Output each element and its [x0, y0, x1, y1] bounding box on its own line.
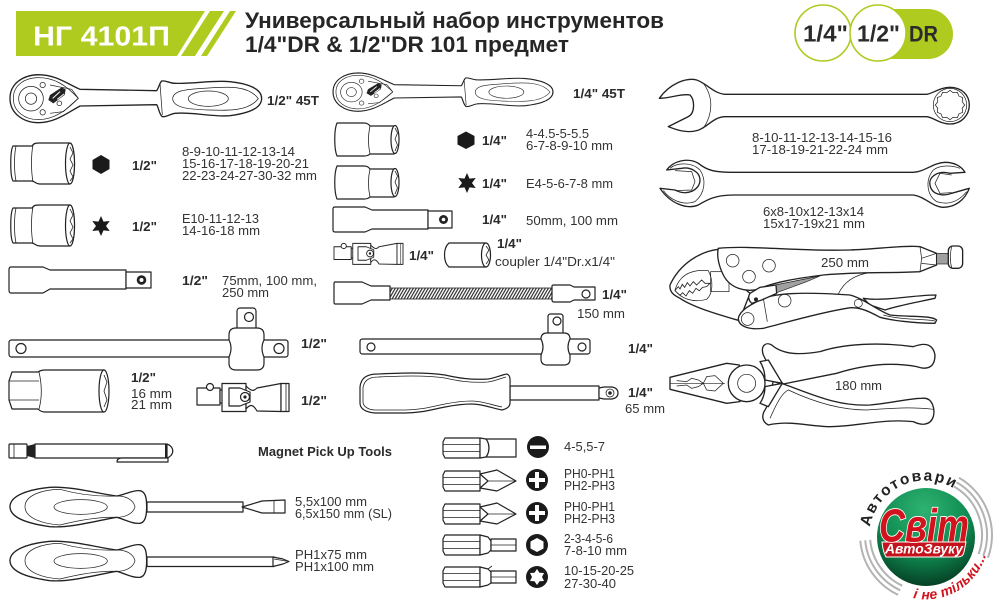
label: ratchet 1/2: 1/2" 45T: [267, 93, 319, 108]
logo: [859, 472, 993, 600]
text: torx sizes: 14-16-18 mm: [182, 224, 260, 238]
icon: phillips 1: [526, 469, 548, 491]
text: hex sizes: 7-8-10 mm: [564, 544, 627, 558]
text: flare wrench sizes: [763, 205, 865, 231]
label: extension 1/2: 1/2": [182, 273, 208, 288]
text: deep socket: [131, 370, 172, 412]
label: joint 1/4: 1/4": [409, 248, 434, 263]
label: locking pliers: 250 mm: [821, 256, 869, 270]
text: flex length: 150 mm: [577, 307, 625, 321]
logo: Автотовари: [860, 472, 956, 526]
extension 1/2: [9, 267, 151, 293]
title: Универсальный набор инструментов: [245, 8, 664, 33]
text: phillips screwdriver: PH1x100 mm: [295, 560, 374, 574]
bit: hex: [443, 535, 516, 555]
phillips screwdriver: [10, 541, 289, 581]
label: size 1/4: 1/4": [482, 133, 507, 148]
label: size 1/4: 1/4": [482, 176, 507, 191]
text: coupler: coupler 1/4"Dr.x1/4": [495, 255, 615, 269]
socket 1/2 torx: [11, 205, 74, 246]
text: socket sizes: 15-16-17-18-19-20-21: [182, 157, 309, 171]
coupler: [444, 243, 490, 267]
label: flex 1/4: 1/4": [602, 287, 627, 302]
text: hex sizes: [564, 532, 627, 558]
text: phillips 1 sizes: [564, 467, 615, 493]
universal joint 1/2: [197, 384, 289, 412]
text: torx sizes: 10-15-20-25: [564, 564, 634, 578]
icon: hexagon: [92, 155, 110, 174]
bit: slotted: [443, 438, 516, 458]
text: flat screwdriver: 5,5x100 mm: [295, 495, 367, 509]
icon: slotted: [527, 436, 549, 458]
text: combination wrench sizes: 8-10-11-12-13-14-15-16: [752, 131, 892, 145]
text: phillips 2 sizes: PH2-PH3: [564, 512, 615, 526]
text: extension sizes: 75mm, 100 mm,: [222, 274, 317, 288]
icon: torx: [526, 566, 548, 588]
text: phillips 1 sizes: PH2-PH3: [564, 479, 615, 493]
label: T-bar 1/2: 1/2": [301, 336, 327, 351]
text: slotted sizes: 4-5,5-7: [564, 440, 605, 454]
text: phillips 2 sizes: [564, 500, 615, 526]
socket 1/4 torx: [335, 166, 399, 199]
label: spinner size: 1/4": [628, 385, 653, 400]
text: flat screwdriver: 6,5x150 mm (SL): [295, 507, 392, 521]
text: torx sizes: [182, 212, 260, 238]
logo: АвтоЗвуку: [884, 540, 964, 556]
label: extension 1/4: 1/4": [482, 212, 507, 227]
icon: star: [458, 173, 476, 193]
flare nut wrench: [660, 160, 969, 207]
text: torx sizes: [564, 564, 634, 591]
text: torx sizes 1/4: E4-5-6-7-8 mm: [526, 177, 613, 191]
text: coupler: 1/4": [497, 236, 522, 251]
text: socket sizes: 8-9-10-11-12-13-14: [182, 145, 295, 159]
text: torx sizes: 27-30-40: [564, 577, 616, 591]
locking pliers: [670, 246, 963, 329]
icon: star: [92, 216, 110, 236]
icon: hexagon: [458, 132, 474, 149]
label: size 1/2: 1/2": [132, 219, 157, 234]
text: socket sizes 1/4: 4-4.5-5-5.5: [526, 127, 589, 141]
banner: model number: НГ 4101П: [33, 20, 170, 52]
text: magnet tool: Magnet Pick Up Tools: [258, 445, 392, 459]
icon: phillips 2: [526, 502, 548, 524]
sliding T-bar 1/2: [9, 308, 288, 370]
text: deep socket: 16 mm: [131, 387, 172, 401]
combination wrench: [659, 79, 969, 132]
text: phillips screwdriver: [295, 548, 374, 574]
text: combination wrench sizes: [752, 131, 892, 157]
bit: torx: [443, 566, 516, 587]
text: phillips screwdriver: PH1x75 mm: [295, 548, 367, 562]
label: joint 1/2: 1/2": [301, 393, 327, 408]
text: socket sizes 1/4: 6-7-8-9-10 mm: [526, 139, 613, 153]
text: torx sizes: E10-11-12-13: [182, 212, 259, 226]
title: 1/4"DR & 1/2"DR 101 предмет: [245, 32, 569, 57]
logo: Світ: [879, 500, 969, 552]
badge: drive sizes: [795, 5, 953, 61]
text: extension sizes 1/4: 50mm, 100 mm: [526, 214, 618, 228]
badge: drive sizes: 1/2": [857, 20, 900, 46]
socket 1/4 hex: [335, 123, 399, 156]
text: socket sizes: 22-23-24-27-30-32 mm: [182, 169, 317, 183]
label: ratchet 1/4: 1/4" 45T: [573, 86, 625, 101]
text: combination wrench sizes: 17-18-19-21-22-24 mm: [752, 143, 888, 157]
text: phillips 2 sizes: PH0-PH1: [564, 500, 615, 514]
badge: drive sizes: 1/4": [803, 20, 848, 46]
text: hex sizes: 2-3-4-5-6: [564, 532, 613, 546]
text: socket sizes: [182, 145, 317, 183]
bit: phillips 1: [443, 470, 516, 491]
extension 1/4: [333, 207, 452, 232]
text: deep socket: 21 mm: [131, 398, 172, 412]
sliding T-bar 1/4: [360, 314, 590, 365]
label: size 1/2: 1/2": [132, 158, 157, 173]
logo: і не тільки...: [913, 556, 986, 600]
flexible extension: [334, 282, 595, 304]
label: T-bar 1/4: 1/4": [628, 341, 653, 356]
text: extension sizes: [222, 274, 317, 300]
bit: phillips 2: [443, 503, 516, 524]
text: flare wrench sizes: 15x17-19x21 mm: [763, 217, 865, 231]
ratchet 1/2: [10, 75, 262, 123]
magnet pick up tool: [9, 444, 173, 462]
flat screwdriver: [10, 487, 285, 527]
text: socket sizes 1/4: [526, 127, 613, 153]
text: flare wrench sizes: 6x8-10x12-13x14: [763, 205, 864, 219]
spinner screwdriver: [360, 373, 618, 413]
label: combination pliers: 180 mm: [835, 379, 882, 393]
deep socket 1/2: [9, 370, 109, 412]
title: [245, 8, 664, 57]
banner: model number: [16, 11, 236, 56]
icon: hex: [526, 534, 548, 556]
badge: drive sizes: DR: [909, 22, 938, 46]
text: phillips 1 sizes: PH0-PH1: [564, 467, 615, 481]
ratchet 1/4: [333, 73, 553, 111]
text: extension sizes: 250 mm: [222, 286, 269, 300]
universal joint 1/4: [334, 243, 403, 264]
text: coupler: [495, 236, 615, 269]
text: flat screwdriver: [295, 495, 392, 521]
socket 1/2 hex: [11, 143, 74, 184]
text: deep socket: 1/2": [131, 370, 156, 385]
combination pliers: [670, 344, 935, 427]
text: spinner length: 65 mm: [625, 402, 665, 416]
